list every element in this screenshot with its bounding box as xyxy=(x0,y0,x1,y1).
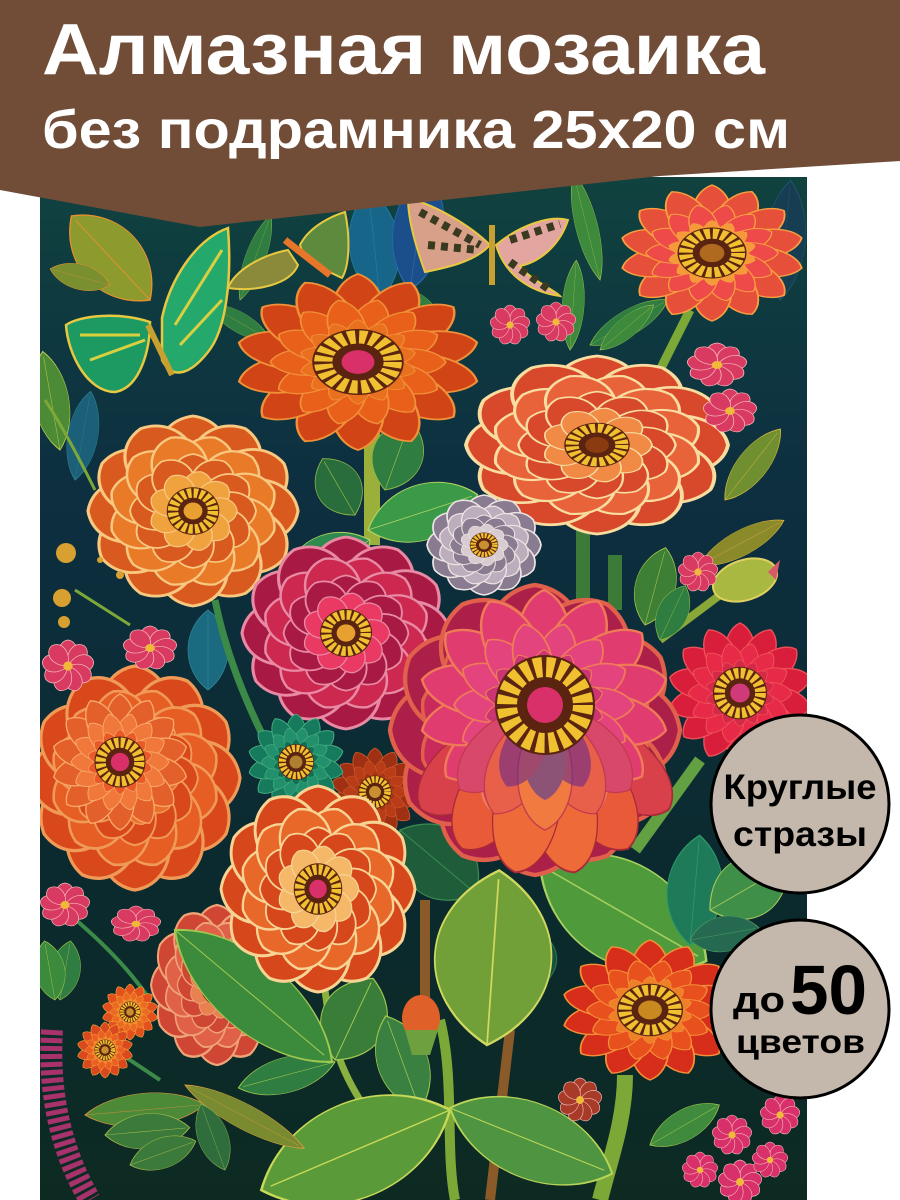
panel: flower artwork xyxy=(25,168,814,1200)
plant stems xyxy=(45,310,720,1200)
flower: large orange dahlia xyxy=(462,353,732,537)
bud: centre bottom xyxy=(402,995,440,1055)
flower: teal small xyxy=(248,714,344,798)
flower: magenta ball xyxy=(239,534,453,732)
badge: up to 50 colours xyxy=(711,920,889,1098)
flower: left large orange xyxy=(27,662,243,894)
badge: up to 50 colours: цветов xyxy=(736,1023,865,1060)
butterfly: green xyxy=(66,228,229,392)
flower: orange lower left xyxy=(218,783,418,995)
butterfly: small yellow-green xyxy=(228,212,348,289)
leaves: right side olive xyxy=(634,428,784,640)
flower: right red xyxy=(666,623,814,763)
badge: round rhinestones: Круглые xyxy=(724,768,876,807)
flower: orange flat top xyxy=(233,274,483,450)
flower: coral ball xyxy=(150,904,259,1066)
badge: round rhinestones xyxy=(711,715,889,893)
badge: up to 50 colours: до xyxy=(733,979,785,1020)
bud: upper right xyxy=(712,557,780,603)
butterfly: pink xyxy=(408,198,568,296)
flower: big pink centre xyxy=(385,580,690,880)
header: brown banner xyxy=(0,0,900,227)
artwork background xyxy=(40,177,807,1200)
flower: left orange ball xyxy=(85,413,301,609)
leaves: upper centre xyxy=(302,432,478,548)
flower: dark red small xyxy=(332,748,410,830)
badge: up to 50 colours: 50 xyxy=(790,951,867,1029)
pink flowers: bottom right xyxy=(681,1095,801,1200)
spike: magenta lupine xyxy=(51,1030,90,1200)
flower: lower right red-orange xyxy=(563,939,720,1081)
large leaves behind the flowers xyxy=(30,803,803,1200)
flower: grey-white small xyxy=(425,493,543,597)
yellow small blossoms left xyxy=(53,543,124,628)
subtitle: без подрамника 25х20 см xyxy=(42,100,790,160)
leaf: orange-green top left xyxy=(50,214,152,302)
leaf: long front leaf over coral ball xyxy=(174,928,334,1063)
flower: small orange cluster xyxy=(76,984,159,1078)
small pink flowers xyxy=(39,302,758,1123)
badge: round rhinestones: стразы xyxy=(733,815,867,854)
flower: top right pink-orange xyxy=(618,185,806,321)
background foliage: blue and teal leaves xyxy=(25,168,810,1004)
title: Алмазная мозаика xyxy=(42,10,766,90)
